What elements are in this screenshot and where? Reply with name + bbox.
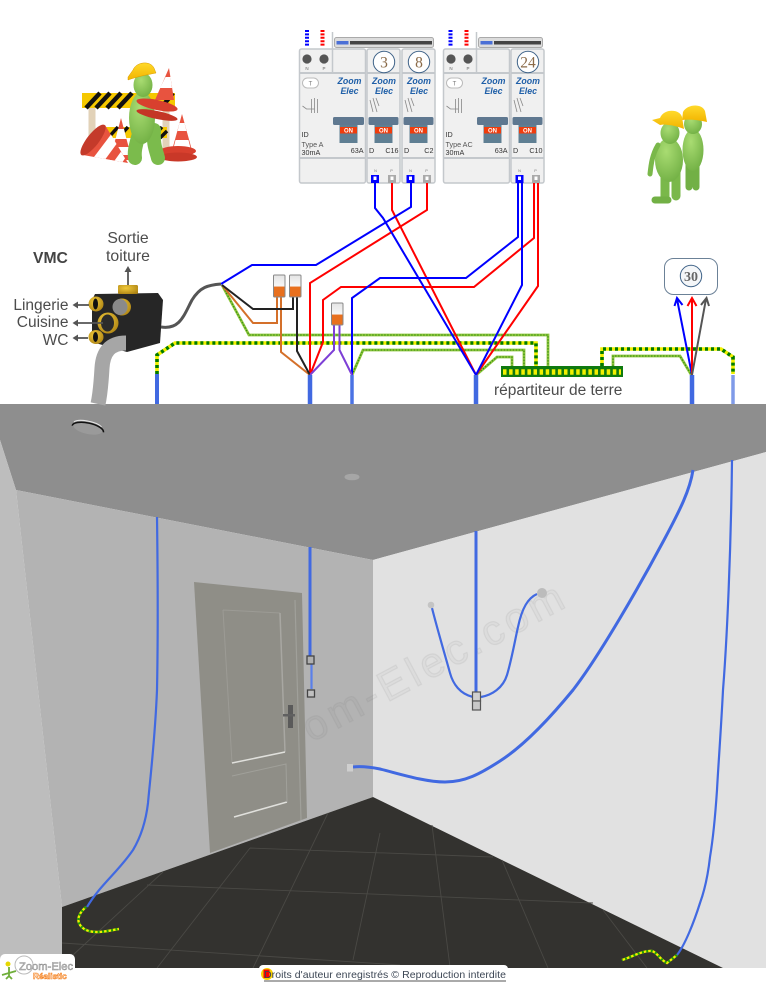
breaker 3: 3 (380, 54, 388, 72)
ceiling (0, 404, 766, 560)
VMC labels: Sortie (107, 230, 149, 247)
breaker 8: D (404, 146, 409, 155)
red conductors (310, 183, 538, 375)
VMC labels: Cuisine (17, 314, 68, 331)
terminals (516, 175, 540, 183)
green figure legs (135, 130, 158, 158)
drops to ceiling (157, 374, 733, 404)
right cone (159, 114, 197, 162)
differential ID Type A (300, 32, 366, 183)
WC port (88, 330, 104, 344)
wire connectors (274, 275, 343, 325)
cable: switch drop (308, 547, 312, 656)
black wires (222, 285, 310, 375)
footer white band (0, 968, 766, 984)
VMC labels: toiture (106, 248, 150, 265)
room scene (0, 404, 766, 968)
VMC labels: Lingerie (13, 297, 68, 314)
right wall (373, 452, 766, 968)
held cones (135, 68, 179, 123)
earth: left floor (78, 907, 119, 932)
back wall (16, 490, 373, 907)
logo (0, 954, 75, 984)
grey duct (98, 343, 126, 404)
breaker 24: 24 (520, 54, 536, 72)
VMC cable (161, 284, 221, 327)
cable: far right (677, 460, 732, 955)
electrical panel 1 (300, 30, 435, 183)
light earth wires (222, 285, 692, 376)
watermark: Zoom-Elec.com (242, 571, 576, 778)
breaker 8 (402, 49, 435, 183)
breaker 24 (511, 49, 544, 183)
small cone (110, 118, 132, 160)
grey port (112, 298, 131, 316)
head (134, 73, 152, 97)
feed pins (307, 30, 322, 47)
door (194, 582, 307, 853)
mascot: two workers (650, 105, 707, 200)
helmet (128, 63, 156, 80)
wall box (347, 764, 353, 772)
differential ID Type AC: Type AC (446, 140, 473, 149)
wall light left (428, 602, 434, 608)
feed pins (450, 30, 466, 47)
device box 30: 30 (684, 270, 698, 285)
copyright: Droits d'auteur enregistrés © Reproduction interdite (264, 969, 506, 981)
top outlet (118, 285, 138, 294)
breaker 8: 8 (415, 54, 423, 72)
wiring (157, 183, 733, 404)
orange wires (222, 285, 310, 375)
electrical panel 2 (444, 30, 544, 183)
front worker (665, 170, 676, 198)
VMC arrows (72, 266, 132, 342)
main earth wires (157, 343, 733, 374)
breaker 24: D (513, 146, 518, 155)
cable: central drop (474, 531, 478, 692)
cuisine port (98, 312, 118, 334)
lingerie port (88, 296, 104, 312)
breaker 8: C2 (424, 146, 434, 155)
door handle (283, 705, 295, 728)
mascot: worker with cones (77, 63, 197, 163)
arrows to box (674, 298, 709, 375)
blue conductors (221, 183, 522, 375)
earth distribution block (501, 366, 623, 377)
logo: Zoom-Elec (19, 961, 73, 973)
comb bar (334, 38, 434, 48)
comb bar (478, 38, 542, 48)
fallen cone (77, 121, 128, 163)
terminals (371, 175, 431, 183)
earth: right floor (622, 951, 677, 963)
label: répartiteur de terre: répartiteur de terre (494, 382, 622, 399)
device box 30 (664, 258, 718, 294)
cable: left wall (87, 517, 158, 907)
body (92, 293, 163, 352)
cable: lights (432, 594, 537, 697)
breaker 3: D (369, 146, 374, 155)
ceiling vent (71, 418, 105, 437)
cable: right wall (353, 470, 693, 782)
barrier (92, 108, 166, 155)
VMC unit (88, 285, 163, 404)
breaker 3: C16 (385, 146, 399, 155)
switch lower (308, 690, 314, 697)
copyright (259, 965, 508, 984)
ceiling light (344, 474, 360, 480)
VMC labels (13, 230, 150, 349)
switch upper (307, 656, 314, 664)
VMC labels: WC (43, 332, 68, 349)
VMC labels: VMC (33, 250, 68, 267)
logo: Réalistic (33, 972, 67, 981)
back worker (689, 165, 696, 187)
wall light right (537, 588, 547, 598)
left wall (0, 440, 62, 968)
floor (62, 797, 723, 968)
green figure torso (129, 92, 155, 144)
central outlets (472, 692, 480, 710)
breaker 3 (367, 49, 400, 183)
purple wires (310, 324, 352, 375)
differential ID Type AC (444, 32, 510, 183)
breaker 24: C10 (529, 146, 543, 155)
differential ID Type A: Type A (302, 140, 324, 149)
